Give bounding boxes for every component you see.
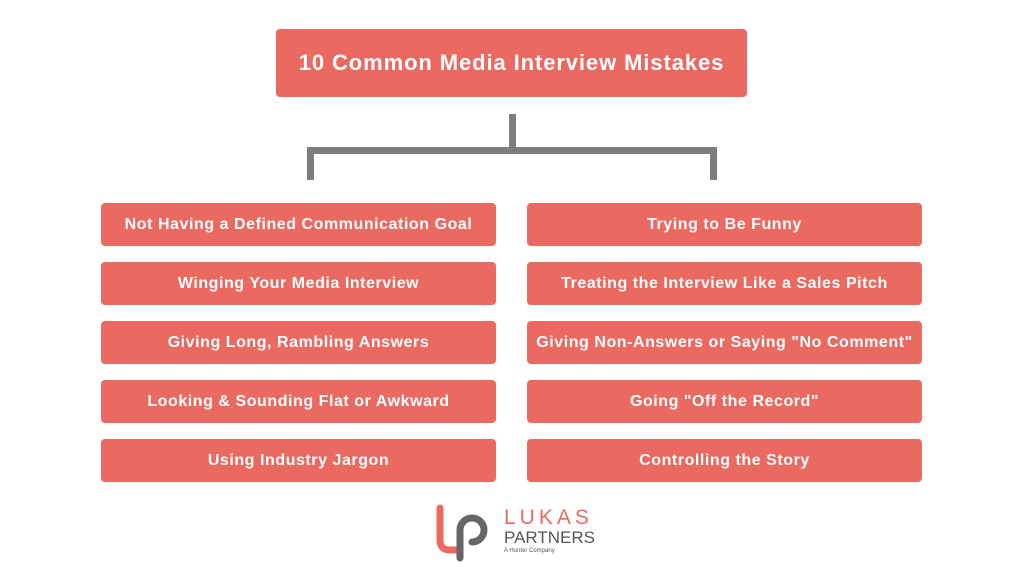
title: 10 Common Media Interview Mistakes (299, 50, 724, 75)
right item 3 (527, 321, 922, 364)
right item 5: Controlling the Story (639, 452, 810, 468)
logo (436, 504, 595, 562)
left item 5: Using Industry Jargon (208, 452, 389, 468)
title (276, 29, 747, 97)
right item 3: Giving Non-Answers or Saying "No Comment" (536, 334, 913, 350)
right item 1 (527, 203, 922, 246)
right item 4: Going "Off the Record" (630, 392, 819, 410)
right item 2 (527, 262, 922, 305)
right item 5 (527, 439, 922, 482)
left item 4: Looking & Sounding Flat or Awkward (147, 392, 450, 410)
logo: A Hunter Company (504, 548, 555, 554)
left item 1 (101, 203, 496, 246)
left item 4 (101, 380, 496, 423)
right item 1: Trying to Be Funny (647, 216, 802, 232)
right item 4 (527, 380, 922, 423)
left item 1: Not Having a Defined Communication Goal (125, 216, 472, 232)
logo: PARTNERS (504, 528, 595, 547)
left item 3: Giving Long, Rambling Answers (168, 334, 429, 350)
right item 2: Treating the Interview Like a Sales Pitch (561, 274, 888, 292)
logo: LUKAS (504, 506, 593, 529)
connector tree (307, 114, 717, 180)
left item 2 (101, 262, 496, 305)
left item 2: Winging Your Media Interview (178, 274, 419, 292)
left item 3 (101, 321, 496, 364)
left item 5 (101, 439, 496, 482)
